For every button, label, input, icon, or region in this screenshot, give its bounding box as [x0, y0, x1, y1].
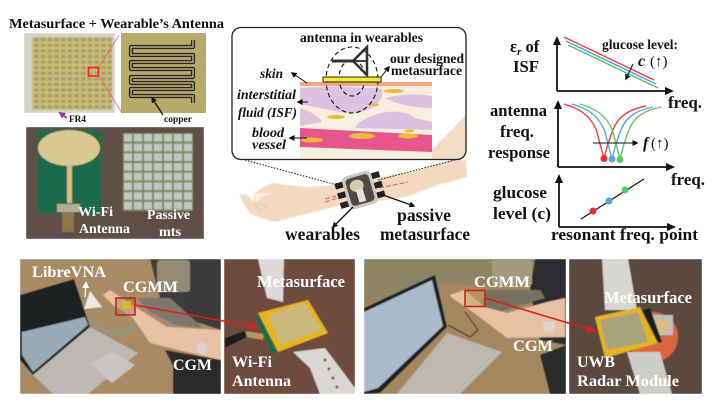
chart: permittivity of ISF: (↑): [650, 54, 668, 70]
interstitial fluid blobs: [300, 87, 432, 130]
label: blood vessel: vessel: [252, 137, 286, 152]
chart: permittivity of ISF: glucose level:: [602, 37, 678, 52]
label: wearables: wearables: [285, 224, 360, 244]
label: blood vessel: blood: [252, 125, 284, 140]
label: copper: copper: [164, 115, 193, 125]
chart: antenna frequency response: freq.: [500, 122, 534, 141]
chart: permittivity of ISF: c: [638, 53, 645, 70]
photo: Wi-Fi antenna and passive metasurface: mts: [159, 225, 182, 240]
chart: antenna frequency response: [488, 101, 705, 189]
panel outline: [232, 28, 466, 160]
chart: permittivity of ISF: of: [521, 37, 540, 56]
label: passive metasurface: metasurface: [380, 224, 470, 244]
label: skin: skin: [259, 66, 283, 81]
label: interstitial fluid: [237, 87, 308, 121]
photo: UWB metasurface on watch: Metasurface: [604, 288, 692, 307]
LibreVNA pointer: [85, 283, 86, 297]
CGMM highlight box: [116, 298, 135, 315]
chart: glucose level versus resonant frequency: glucose: [493, 183, 547, 202]
photo: UWB metasurface on watch: [569, 259, 702, 394]
chart: antenna frequency response: antenna: [490, 101, 547, 120]
photo: Wi-Fi antenna and passive metasurface: Passive: [147, 208, 190, 223]
antenna symbol: [332, 47, 367, 75]
chart: antenna frequency response: (↑): [651, 136, 668, 152]
connector arrow: UWB CGMM to detail: [485, 298, 595, 331]
glucose particles: [301, 89, 418, 142]
label: FR4: [60, 113, 86, 125]
pink signal dashes: [325, 182, 408, 202]
chart: antenna frequency response: response: [488, 143, 550, 162]
chart: permittivity of ISF: ISF: [513, 57, 539, 76]
photo: metasurface board: [24, 33, 115, 113]
photo: Wi-Fi metasurface on watch: Antenna: [232, 373, 291, 390]
blood vessel: [300, 128, 432, 152]
skin layer: [300, 82, 432, 86]
photo: Wi-Fi antenna and passive metasurface: Antenna: [79, 222, 130, 237]
photo: Wi-Fi setup with laptop: CGMM: [123, 279, 178, 296]
arm illustration: [239, 160, 467, 222]
chart: antenna frequency response: f: [643, 135, 650, 152]
chart: permittivity of ISF: ε: [510, 37, 517, 56]
designed metasurface bar: [323, 77, 381, 82]
chart: permittivity of ISF: [510, 37, 702, 112]
chart: permittivity of ISF: freq.: [668, 93, 702, 112]
label: antenna in wearables: antenna in wearables: [300, 30, 423, 45]
label: interstitial fluid: fluid (ISF): [238, 105, 297, 121]
photo: Wi-Fi setup with laptop: LibreVNA: [32, 264, 106, 281]
chart: glucose level versus resonant frequency: level (c): [493, 204, 551, 223]
photo: Wi-Fi metasurface on watch: [224, 259, 355, 394]
wearable with metasurface tabs: [333, 167, 387, 213]
photo: UWB setup with laptop: CGMM: [474, 274, 530, 291]
CGMM highlight box: [465, 290, 485, 306]
chart: glucose level versus resonant frequency: resonant freq. point: [551, 225, 698, 244]
chart: permittivity of ISF: r: [517, 46, 522, 58]
connector arrow: Wi-Fi CGMM to detail: [135, 305, 257, 327]
photo: Wi-Fi antenna and passive metasurface: Wi-Fi: [78, 205, 113, 220]
photo: UWB metasurface on watch: UWB: [577, 354, 615, 371]
label: our designed metasurface: [381, 51, 464, 78]
tissue layer: [300, 84, 432, 160]
dashed field lobes: [326, 47, 378, 113]
photo: UWB setup with laptop: [364, 259, 566, 394]
chart: antenna frequency response: freq.: [671, 170, 705, 189]
label: passive metasurface: passive: [397, 205, 451, 225]
label: wearables: [285, 207, 360, 244]
label: our designed metasurface: metasurface: [391, 63, 462, 78]
photo: UWB metasurface on watch: Radar Module: [577, 373, 679, 390]
label: passive metasurface: [380, 194, 470, 244]
label: skin: [259, 66, 307, 83]
photo: Wi-Fi setup with laptop: CGM: [173, 357, 212, 374]
photo: UWB setup with laptop: CGM: [513, 338, 553, 355]
photo: Wi-Fi metasurface on watch: Wi-Fi: [232, 354, 273, 371]
photo: Wi-Fi setup with laptop: [20, 259, 221, 394]
panel: skin cross-section callout: [232, 28, 466, 160]
label: interstitial fluid: interstitial: [237, 87, 296, 102]
title: Metasurface + Wearable’s Antenna: [9, 17, 224, 32]
dotted callout lines: [245, 160, 455, 185]
label: blood vessel: [252, 125, 307, 152]
neighbouring arm fragment: [432, 115, 466, 160]
photo: copper meander detail: [121, 33, 206, 113]
photo: Wi-Fi metasurface on watch: Metasurface: [257, 272, 345, 291]
zoom guide lines: [99, 35, 122, 113]
label: copper: [152, 98, 193, 125]
label: FR4: FR4: [69, 115, 86, 125]
label: our designed metasurface: our designed: [390, 51, 464, 66]
chart: glucose level versus resonant frequency: [493, 176, 698, 244]
photo: Wi-Fi antenna and passive metasurface: [26, 127, 204, 240]
zoom box on board: [88, 68, 98, 76]
